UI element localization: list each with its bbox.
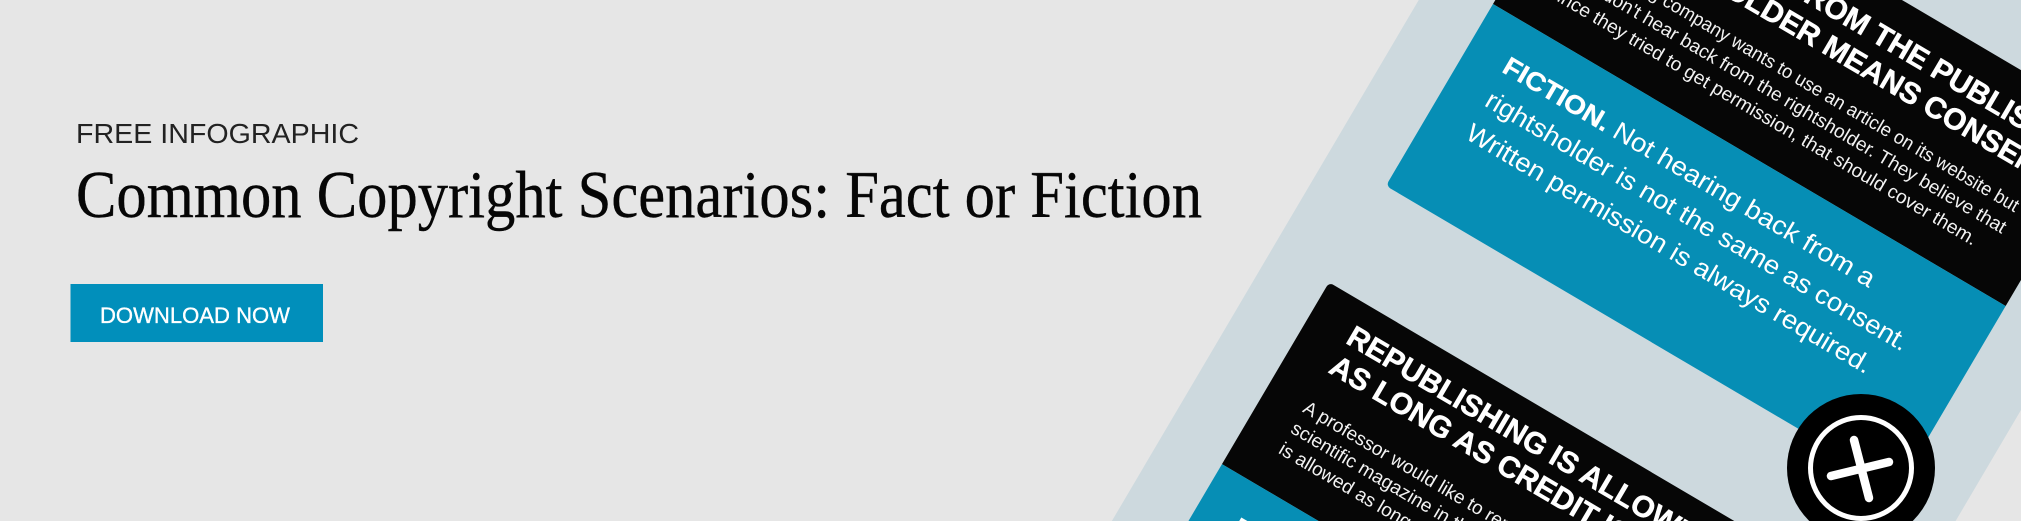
download button: DOWNLOAD NOW bbox=[100, 303, 290, 328]
scenario card 1 bbox=[1386, 0, 2021, 488]
title: Common Copyright Scenarios: Fact or Fiction bbox=[76, 158, 1202, 232]
icon: circled cross bbox=[1787, 394, 1935, 521]
card 1 answer text: FICTION. Not hearing back from a bbox=[1498, 51, 1882, 294]
card 2 question block bbox=[1222, 282, 1842, 521]
card 1 answer block bbox=[1386, 4, 2006, 488]
preview background band bbox=[726, 0, 2021, 521]
card 2 answer block bbox=[1115, 464, 1735, 521]
scenario card 2 bbox=[1115, 282, 1842, 521]
card 1 answer text: rightsholder is not the same as consent. bbox=[1480, 84, 1914, 357]
infographic preview bbox=[726, 0, 2021, 521]
eyebrow label: FREE INFOGRAPHIC bbox=[76, 118, 359, 149]
card 1 question block bbox=[1493, 0, 2021, 306]
card 1 answer text: Written permission is always required. bbox=[1461, 117, 1878, 380]
download button bbox=[70, 284, 323, 342]
card 1 answer text bbox=[1459, 51, 1934, 390]
